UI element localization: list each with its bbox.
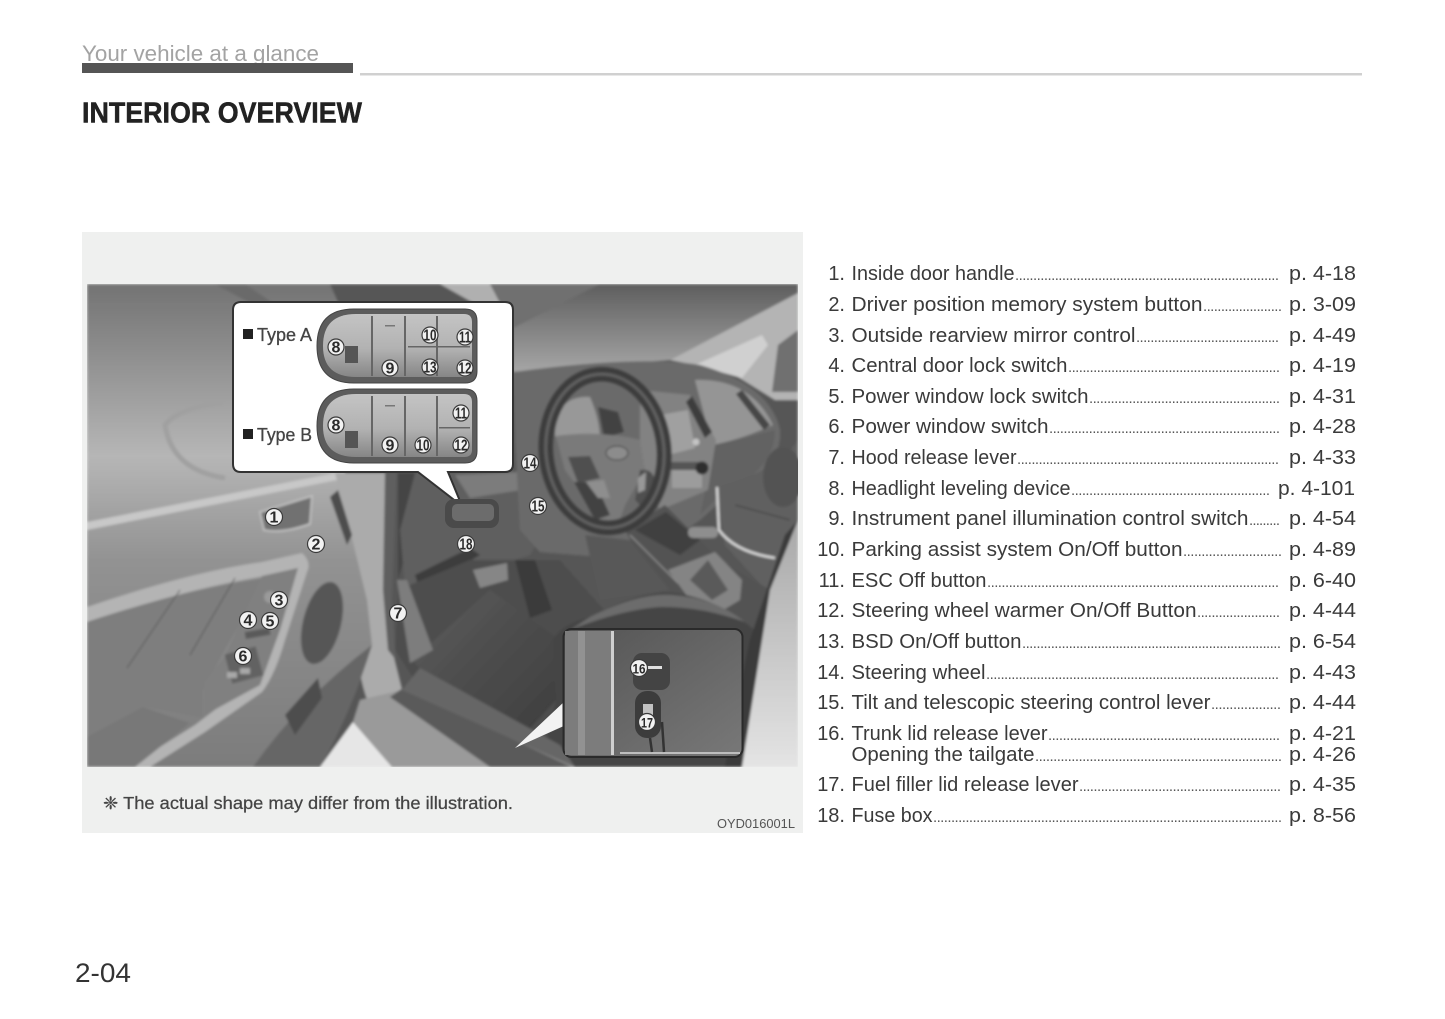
glovebox — [706, 440, 768, 497]
item 17 — [817, 774, 1356, 796]
item 8: 8. — [828, 478, 845, 500]
item 18: p. 8-56 — [1289, 805, 1356, 827]
item 10: Parking assist system On/Off button — [852, 539, 1182, 561]
item 9: p. 4-54 — [1289, 508, 1356, 530]
pedals — [473, 563, 508, 588]
number labels on the main drawing: 5 — [266, 614, 275, 630]
item 18 — [817, 805, 1356, 827]
item 4: p. 4-19 — [1289, 355, 1356, 377]
labels 8 9 10 13 11 12: 9 — [386, 360, 395, 378]
kick panel — [397, 580, 433, 663]
item 1: Inside door handle — [852, 263, 1014, 285]
item 2 — [828, 294, 1356, 316]
label 17: 17 — [641, 714, 653, 730]
labels 8 9 10 13 11 12 — [328, 327, 473, 378]
item 16: Trunk lid release lever — [852, 723, 1048, 745]
item 7 — [828, 447, 1356, 469]
item 5: ..................................................... — [1089, 390, 1280, 407]
labels 8 9 10 13 11 12: 13 — [424, 360, 437, 376]
item 12: 12. — [817, 600, 845, 622]
item 5: Power window lock switch — [852, 386, 1088, 408]
callout: seat-side switch types — [233, 302, 513, 506]
item 13: ........................................................................ — [1022, 635, 1281, 652]
item 14: p. 4-43 — [1289, 662, 1356, 684]
item 14: 14. — [817, 662, 845, 684]
inset background — [564, 629, 742, 757]
item 8: Headlight leveling device — [852, 478, 1070, 500]
labels 8 9 10 11 12: 9 — [386, 438, 395, 454]
item 4: Central door lock switch — [852, 355, 1068, 377]
item 18: 18. — [817, 805, 845, 827]
right pillar and glass — [670, 293, 798, 400]
item 11: p. 6-40 — [1289, 570, 1356, 592]
running header: section name: Your vehicle at a glance — [82, 41, 319, 66]
footwell background — [396, 560, 601, 736]
switch panel type A — [317, 309, 477, 383]
item 1: ......................................................................... — [1015, 267, 1279, 284]
item 10 — [817, 539, 1356, 561]
item 16: ................................................................ — [1048, 727, 1280, 744]
item 7: Hood release lever — [852, 447, 1017, 469]
item 12: p. 4-44 — [1289, 600, 1356, 622]
item 13: 13. — [817, 631, 845, 653]
item 7: p. 4-33 — [1289, 447, 1356, 469]
item 6: Power window switch — [852, 416, 1048, 438]
number labels on the main drawing: 14 — [524, 456, 537, 472]
labels 8 9 10 11 12: 10 — [416, 438, 430, 454]
item 16: p. 4-21 — [1289, 723, 1356, 745]
item 12: Steering wheel warmer On/Off Button — [852, 600, 1196, 622]
number labels on the main drawing: 7 — [394, 606, 403, 622]
item 8: ....................................................... — [1071, 482, 1270, 499]
speaker recess — [300, 581, 344, 665]
door panel — [87, 473, 372, 767]
item 2: Driver position memory system button — [852, 294, 1202, 316]
item 12: ....................... — [1197, 604, 1280, 621]
item 3: Outside rearview mirror control — [852, 325, 1136, 347]
item 4: ........................................................... — [1068, 359, 1280, 376]
image code: OYD016001L — [717, 817, 795, 831]
lower dash left — [400, 473, 533, 582]
item 11 — [819, 570, 1356, 592]
header thick bar — [82, 63, 353, 73]
inset white line — [611, 631, 614, 755]
inset: trunk and fuel release levers — [564, 629, 742, 757]
item 18: ................................................................................................. — [933, 809, 1282, 826]
legend: type B: Type B — [257, 425, 312, 445]
item 3: ........................................ — [1136, 329, 1279, 346]
door pocket — [253, 645, 372, 767]
item 14: ................................................................................. — [986, 666, 1279, 683]
number labels on the main drawing: 15 — [532, 498, 545, 516]
item 10: p. 4-89 — [1289, 539, 1356, 561]
item 16: p. 4-26 — [1289, 744, 1356, 766]
list: component index — [817, 263, 1356, 827]
item 6: p. 4-28 — [1289, 416, 1356, 438]
center console — [626, 504, 687, 558]
car interior drawing — [87, 284, 803, 767]
white floor gap — [320, 722, 392, 767]
item 17: Fuel filler lid release lever — [852, 774, 1079, 796]
item 1 — [828, 263, 1356, 285]
door frame pillar — [335, 473, 402, 702]
steering hub — [556, 434, 645, 525]
trunk lever button — [633, 653, 670, 690]
item 10: 10. — [817, 539, 845, 561]
item 15: 15. — [817, 692, 845, 714]
illustration background card — [82, 232, 803, 833]
item 2: ...................... — [1203, 298, 1282, 315]
label 16: 16 — [632, 660, 646, 676]
door trim band — [87, 553, 309, 767]
number labels on the main drawing: 4 — [244, 612, 253, 630]
item 6: 6. — [828, 416, 845, 438]
page number: 2-04 — [75, 958, 131, 988]
labels 8 9 10 11 12: 12 — [454, 438, 468, 454]
legend: type A: Type A — [257, 325, 312, 345]
labels 8 9 10 11 12: 11 — [455, 406, 467, 422]
header thin rule — [360, 73, 1362, 76]
item 10: ........................... — [1183, 543, 1282, 560]
item 5 — [828, 386, 1356, 408]
item 9: Instrument panel illumination control switch — [852, 508, 1248, 530]
item 4: 4. — [828, 355, 845, 377]
number labels on the main drawing: 6 — [239, 648, 248, 666]
item 11: 11. — [819, 570, 845, 592]
fuel lever — [635, 691, 661, 738]
item 2: p. 3-09 — [1289, 294, 1356, 316]
labels 8 9 10 13 11 12: 11 — [459, 330, 471, 346]
footnote: ❈ The actual shape may differ from the illustration. — [103, 793, 513, 813]
seat — [575, 594, 753, 767]
inset pillar strip — [565, 631, 611, 755]
window switch panel — [218, 568, 298, 708]
item 16: 16. — [817, 723, 845, 745]
item 12 — [817, 600, 1356, 622]
callout box with pointer — [233, 302, 513, 506]
item 8: p. 4-101 — [1278, 478, 1355, 500]
item 5: 5. — [828, 386, 845, 408]
door jamb shadow — [330, 490, 352, 545]
floor mat — [516, 681, 556, 727]
labels 8 9 10 13 11 12: 8 — [332, 340, 341, 356]
item 11: ................................................................................. — [987, 574, 1279, 591]
windshield — [513, 284, 798, 372]
dashboard — [513, 361, 780, 560]
switch panel type B — [317, 389, 477, 463]
item 15: ................... — [1211, 696, 1281, 713]
item 13 — [817, 631, 1356, 653]
item 3: 3. — [828, 325, 845, 347]
instrument cluster — [555, 397, 600, 445]
number labels on the main drawing: 2 — [312, 536, 321, 554]
item 7: ......................................................................... — [1017, 451, 1279, 468]
item 13: BSD On/Off button — [852, 631, 1022, 653]
item 9: 9. — [828, 508, 845, 530]
item 14 — [817, 662, 1356, 684]
panel: interior illustration — [82, 232, 803, 833]
item 15 — [817, 692, 1356, 714]
item 18: Fuse box — [852, 805, 932, 827]
item 16: .................................................................... — [1035, 748, 1282, 765]
labels 8 9 10 13 11 12: 10 — [424, 328, 437, 344]
number labels on the main drawing: 1 — [270, 510, 279, 526]
headlight switch cluster on dash — [445, 499, 499, 528]
item 6 — [828, 416, 1356, 438]
item 16 — [817, 723, 1356, 766]
item 17: 17. — [817, 774, 845, 796]
item 7: 7. — [828, 447, 845, 469]
door window — [87, 284, 350, 530]
item 15: p. 4-44 — [1289, 692, 1356, 714]
item 1: p. 4-18 — [1289, 263, 1356, 285]
item 15: Tilt and telescopic steering control lever — [852, 692, 1211, 714]
door inner fabric — [88, 579, 260, 676]
labels 8 9 10 11 12 — [328, 405, 469, 454]
number labels on the main drawing — [234, 454, 546, 666]
item 11: ESC Off button — [852, 570, 986, 592]
number labels on the main drawing: 3 — [275, 592, 284, 610]
item 1: 1. — [828, 263, 845, 285]
item 3 — [828, 325, 1356, 347]
center stack — [640, 390, 716, 510]
inside door handle — [260, 496, 312, 531]
passenger door — [720, 444, 798, 586]
item 17: p. 4-35 — [1289, 774, 1356, 796]
armrest — [117, 709, 186, 767]
item 13: p. 6-54 — [1289, 631, 1356, 653]
number labels on the main drawing: 18 — [460, 536, 473, 554]
labels 8 9 10 13 11 12: 12 — [458, 360, 472, 378]
title: INTERIOR OVERVIEW — [82, 98, 363, 130]
steering wheel rim — [538, 368, 672, 534]
sill — [353, 690, 575, 767]
item 3: p. 4-49 — [1289, 325, 1356, 347]
callout pointer: bottom inset — [515, 700, 566, 748]
A pillar stripes — [221, 285, 270, 301]
item 5: p. 4-31 — [1289, 386, 1356, 408]
item 17: ........................................................ — [1079, 778, 1281, 795]
item 14: Steering wheel — [852, 662, 986, 684]
item 2: 2. — [828, 294, 845, 316]
item 8 — [828, 478, 1355, 500]
item 9: ......... — [1249, 512, 1280, 529]
item 16: Opening the tailgate — [852, 744, 1034, 766]
right door edge — [725, 520, 798, 767]
item 6: ................................................................ — [1049, 420, 1280, 437]
item 4 — [828, 355, 1356, 377]
labels 8 9 10 11 12: 8 — [332, 418, 341, 434]
inner door post under callout — [398, 473, 414, 574]
